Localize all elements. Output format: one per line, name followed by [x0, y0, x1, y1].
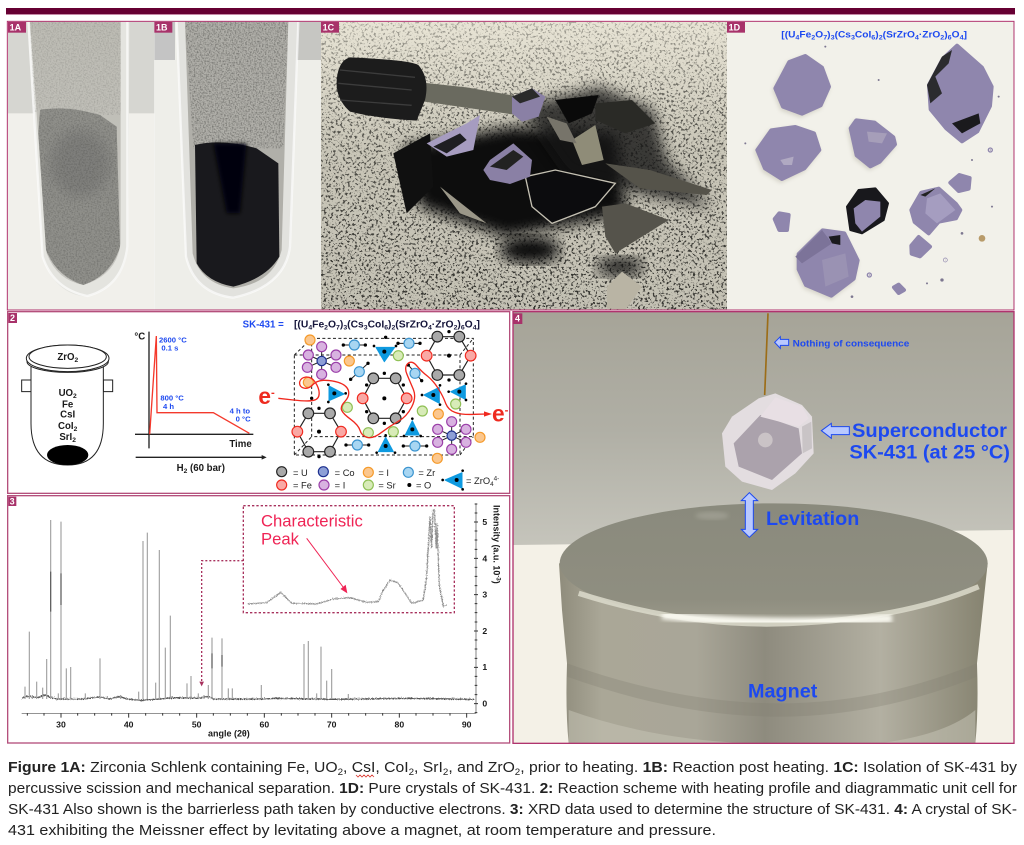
- panel 1A: tube before heating: [8, 22, 154, 310]
- figure caption: percussive scission and mechanical separation. 1D: Pure crystals of SK-431. 2: Reaction scheme with heating profile and diagrammatic unit cell for: [8, 781, 1017, 797]
- electron path: [278, 362, 487, 438]
- right axis: 5: [482, 517, 487, 527]
- right axis: 0: [482, 698, 487, 708]
- peaks: [25, 520, 348, 699]
- panel 4: levitation photograph: [513, 312, 1014, 743]
- chart: heating profile: [134, 331, 253, 450]
- outgoing electron label: e: [492, 400, 505, 426]
- arrow: hydrogen pressure: H: [177, 463, 184, 474]
- figure caption: Figure 1A: Zirconia Schlenk containing Fe, UO: [8, 760, 318, 776]
- legend: [277, 467, 499, 491]
- 1D formula: 6: [948, 35, 952, 42]
- 1D formula: 2: [940, 35, 945, 42]
- 1D formula: 2: [811, 35, 816, 42]
- icon: Schlenk vessel: 2: [75, 357, 79, 364]
- label 1D: [727, 22, 745, 33]
- SK-431 formula: 4: [428, 324, 432, 331]
- brown speck: [979, 235, 985, 242]
- icon: Schlenk vessel: 2: [74, 426, 78, 433]
- figure caption: 431 exhibiting the Meissner effect by levitating above a magnet, at room temperature and pressure.: [8, 823, 716, 839]
- panel 1B: tube after heating: [154, 22, 321, 310]
- CoI6 clusters: [302, 342, 471, 454]
- panel: row 1 photographs: [7, 21, 1014, 310]
- figure caption: , and ZrO: [448, 760, 515, 776]
- strontium ions: [342, 351, 461, 438]
- label 3: [8, 496, 16, 506]
- SK-431 formula: CoI: [368, 319, 384, 330]
- icon: Schlenk vessel: ZrO: [57, 352, 75, 363]
- figure caption: 1B: Reaction post heating. 1C: Isolation of SK-431 by: [643, 760, 1005, 776]
- figure caption: [8, 760, 1018, 839]
- 1D formula: 6: [871, 35, 876, 42]
- label 2: 2: [10, 313, 15, 323]
- SK-431 formula: ): [457, 319, 461, 330]
- label 1A: 1A: [10, 22, 22, 32]
- legend: = I: [378, 468, 389, 478]
- label 1D: 1D: [729, 22, 741, 32]
- arrow: hydrogen pressure: [136, 455, 267, 475]
- 1D formula: Fe: [799, 30, 811, 40]
- bottom axis: 70: [327, 719, 337, 729]
- 1D formula: 4: [960, 35, 964, 42]
- SK-431 formula: Fe: [312, 319, 325, 330]
- label 4: 4: [515, 313, 520, 323]
- y axis title: -3: [494, 575, 500, 581]
- label 1B: [154, 22, 172, 33]
- SK-431 formula: ): [340, 319, 343, 330]
- 1D formula: 3: [831, 35, 835, 42]
- right axis: 3: [482, 590, 487, 600]
- 1D formula: 2: [879, 35, 883, 42]
- figure caption: 2: [515, 767, 520, 777]
- annotation: superconductor: SK-431 (at 25 °C): [849, 442, 1010, 463]
- 1D formula: (Cs: [835, 30, 851, 40]
- SK-431 formula: 3: [364, 324, 368, 331]
- 1D formula: 4: [795, 35, 800, 42]
- baseline noise: [22, 695, 474, 700]
- legend: = O: [416, 481, 431, 491]
- right axis: 1: [482, 662, 487, 672]
- arrow: hydrogen pressure: (60 bar): [187, 463, 225, 474]
- right axis: [474, 503, 487, 713]
- 1D formula: [(U: [781, 30, 794, 40]
- label 4: [513, 313, 522, 324]
- panel 3: XRD data: [8, 496, 510, 743]
- arrow: hydrogen pressure: 2: [184, 468, 188, 475]
- 1D formula: 3: [851, 35, 855, 42]
- 1D formula: (SrZrO: [883, 30, 915, 40]
- magnet: [559, 503, 988, 743]
- SK-431 formula: 2: [324, 324, 328, 331]
- icon: Schlenk vessel: 2: [73, 393, 77, 400]
- dark crystal: [847, 188, 888, 233]
- figure caption: 2: [338, 767, 343, 777]
- ZrO4 tetrahedra: [327, 345, 467, 454]
- legend: = I: [335, 481, 345, 491]
- 1D formula: O: [952, 30, 960, 40]
- bottom axis: 50: [192, 719, 202, 729]
- chart: heating profile: 0 °C: [236, 414, 251, 423]
- SK-431 formula: 4: [308, 324, 312, 331]
- bottom axis: 30: [56, 719, 66, 729]
- SK-431 formula: [(U: [294, 319, 308, 330]
- 1D formula: ): [944, 30, 948, 40]
- zirconium ions with oxygen: [342, 338, 428, 451]
- octagon atoms: [292, 331, 476, 457]
- chart: heating profile: 0.1 s: [161, 344, 178, 353]
- SK-431 formula: 4: [473, 324, 477, 331]
- crystal: [722, 393, 814, 490]
- 1D formula: 7: [823, 35, 828, 42]
- SK-431 formula: (Cs: [347, 319, 364, 330]
- bottom axis: 90: [462, 719, 472, 729]
- legend: 4-: [494, 476, 499, 483]
- icon: Schlenk vessel: SrI: [59, 432, 72, 443]
- legend: = U: [293, 468, 308, 478]
- panel 1D: pure crystals: [727, 22, 1014, 310]
- figure caption: , SrI: [414, 760, 443, 776]
- panel 4 frame: [513, 312, 1014, 743]
- crystal shadows: [754, 56, 896, 300]
- incoming electron label: e: [258, 383, 271, 409]
- label 2: [8, 313, 17, 323]
- chart: heating profile: °C: [134, 331, 145, 342]
- purple crystal fragments: [427, 88, 545, 184]
- right axis: 2: [482, 626, 487, 636]
- callout: characteristic peak inset: Peak: [261, 529, 300, 548]
- inset trace: [247, 510, 447, 607]
- SK-431 formula: 3: [343, 324, 347, 331]
- label 1C: 1C: [323, 22, 335, 32]
- chart: heating profile: Time: [229, 439, 252, 450]
- 1D formula: ·ZrO: [919, 30, 940, 40]
- glass shards: [393, 95, 712, 310]
- 1D formula: O: [815, 30, 823, 40]
- unit cell dashed box: [294, 338, 473, 455]
- label 1B: 1B: [156, 22, 168, 32]
- callout: characteristic peak inset: [199, 506, 454, 686]
- 1D formula: 4: [915, 35, 919, 42]
- icon: Schlenk vessel: CoI: [58, 421, 74, 432]
- top bar: [6, 8, 1015, 15]
- callout text: Characteristic: [261, 511, 363, 530]
- annotation: nothing of consequence: [775, 337, 909, 348]
- icon: Schlenk vessel: CsI: [60, 410, 75, 421]
- annotation: superconductor: Superconductor: [852, 421, 1008, 442]
- chart: heating profile: 2600 °C: [159, 336, 187, 345]
- SK-431 formula: O: [328, 319, 336, 330]
- oxygen dots: [310, 330, 451, 458]
- SK-431 formula: ·ZrO: [432, 319, 454, 330]
- SK-431 formula: 2: [391, 324, 396, 331]
- icon: Schlenk vessel: Fe: [62, 399, 74, 410]
- legend: = Sr: [378, 481, 396, 491]
- magnet highlight edge: [579, 587, 979, 624]
- chart: heating profile: 4 h: [163, 402, 174, 411]
- SK-431 formula: 6: [461, 324, 465, 331]
- legend: = Fe: [293, 481, 312, 491]
- label 1A: [8, 22, 26, 33]
- figure caption: 2: [443, 767, 448, 777]
- outgoing electron label: -: [505, 404, 509, 416]
- SK-431 label: SK-431 =: [243, 319, 284, 330]
- legend: = ZrO: [466, 476, 490, 486]
- crystals: [757, 46, 992, 296]
- panel 1C: broken Schlenk and crystals: [321, 22, 727, 310]
- SK-431 formula: (SrZrO: [395, 319, 428, 330]
- SK-431 formula: 7: [336, 324, 340, 331]
- figure caption: , prior to heating.: [520, 760, 643, 776]
- bottom axis: 80: [395, 719, 404, 729]
- crystal dark and light detail: [780, 50, 980, 287]
- SK-431 formula: 6: [384, 324, 388, 331]
- dust specks: [744, 46, 1000, 298]
- incoming electron label: -: [271, 387, 275, 399]
- figure caption: , CsI, CoI: [343, 760, 409, 776]
- icon: Schlenk vessel: 2: [72, 437, 76, 444]
- label 1C: [321, 22, 339, 33]
- legend: = Co: [335, 468, 355, 478]
- annotation: levitation arrow: Levitation: [766, 509, 859, 530]
- panel 2: reaction scheme: [8, 312, 510, 493]
- SK-431 formula: O: [465, 319, 473, 330]
- annotation: nothing of consequence: Nothing of consequence: [793, 338, 909, 348]
- y axis title: ): [491, 581, 501, 584]
- arrow to peak: [307, 538, 347, 592]
- chart: heating profile: 800 °C: [160, 394, 184, 403]
- SK-431 formula: 2: [454, 324, 458, 331]
- label 3: 3: [10, 496, 15, 506]
- arrowhead of electron path: [484, 411, 492, 417]
- bottom axis: [22, 713, 476, 729]
- U/Fe octagons: [297, 337, 471, 452]
- dark peak segments: [51, 572, 222, 668]
- figure caption: 2: [409, 767, 414, 777]
- SK-431 formula: ]: [477, 319, 480, 330]
- bottom axis: 60: [260, 719, 269, 729]
- chart: XRD pattern: [22, 503, 501, 738]
- row 1 frame: [7, 21, 1014, 310]
- legend: = Zr: [418, 468, 435, 478]
- legend: 4: [490, 481, 494, 488]
- x axis title: angle (2θ): [208, 728, 250, 738]
- 1D formula: CoI: [855, 30, 871, 40]
- y axis title: Intensity (a.u. 10: [491, 505, 501, 575]
- icon: dark plastic cap and stem: [337, 57, 520, 121]
- annotation: magnet: Magnet: [748, 681, 818, 702]
- 1D formula: ]: [964, 30, 967, 40]
- 1D formula: ): [875, 30, 879, 40]
- icon: Schlenk vessel: [22, 345, 113, 465]
- annotation: superconductor: [821, 421, 1010, 463]
- bottom axis: 40: [124, 719, 134, 729]
- annotation: levitation arrow: [741, 493, 859, 537]
- icon: Schlenk vessel: UO: [59, 388, 73, 399]
- diagram: unit cell: [258, 330, 509, 491]
- right axis: 4: [482, 553, 487, 563]
- SK-431 formula: ): [388, 319, 392, 330]
- iodide ions: [303, 335, 485, 463]
- chart: heating profile: 4 h to: [230, 406, 250, 415]
- 1D formula: ): [827, 30, 831, 40]
- figure caption: SK-431 Also shown is the barrierless path taken by conductive electrons. 3: XRD data used to determine the structure of SK-431. 4: A crystal of SK-: [8, 802, 1017, 818]
- wire: [765, 313, 768, 395]
